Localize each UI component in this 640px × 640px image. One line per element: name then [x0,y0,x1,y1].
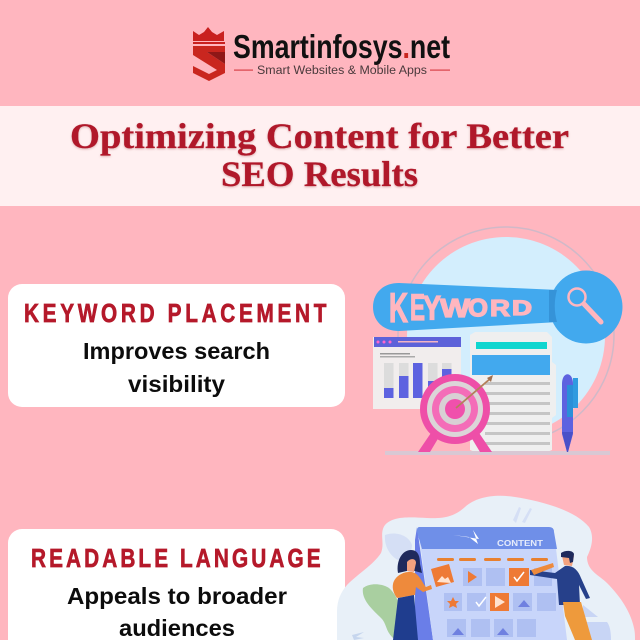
target [418,374,493,452]
logo [193,27,450,81]
title: SEO Results [221,154,418,194]
magnifier icon [568,288,601,322]
title band [0,106,640,206]
illustration: keyword [373,227,622,455]
illustration: content calendar [337,496,635,640]
heading: READABLE LANGUAGE [31,544,321,573]
tagline: Smart Websites & Mobile Apps [257,65,427,77]
document [470,332,556,452]
search bar [373,270,622,344]
content label: CONTENT [497,538,544,548]
brand name: Smartinfosys.net [233,28,450,65]
title: Optimizing Content for Better [70,116,569,156]
panel: keyword placement: visibility [128,371,225,397]
leaf [363,584,401,638]
keyword text: Y [423,290,441,328]
pen [562,374,578,452]
heading: KEYWORD PLACEMENT [24,299,327,328]
keyword text: W [440,293,471,323]
ground [385,451,610,455]
keyword text: D [512,297,532,320]
icon: crown shield [193,27,225,81]
keyword text: R [490,295,510,321]
panel: keyword placement [8,284,345,407]
keyword text: O [468,294,488,322]
keyword text: E [410,287,425,328]
body text: Improves search [83,338,270,364]
panel: readable language [8,529,345,640]
decorative foliage [385,507,532,560]
man [530,551,592,640]
woman [393,550,432,640]
keyword text [389,284,532,331]
chart window [373,337,461,409]
keyword text: K [389,284,408,331]
calendar [415,527,567,640]
body text: Appeals to broader [67,583,287,609]
title [70,116,569,194]
